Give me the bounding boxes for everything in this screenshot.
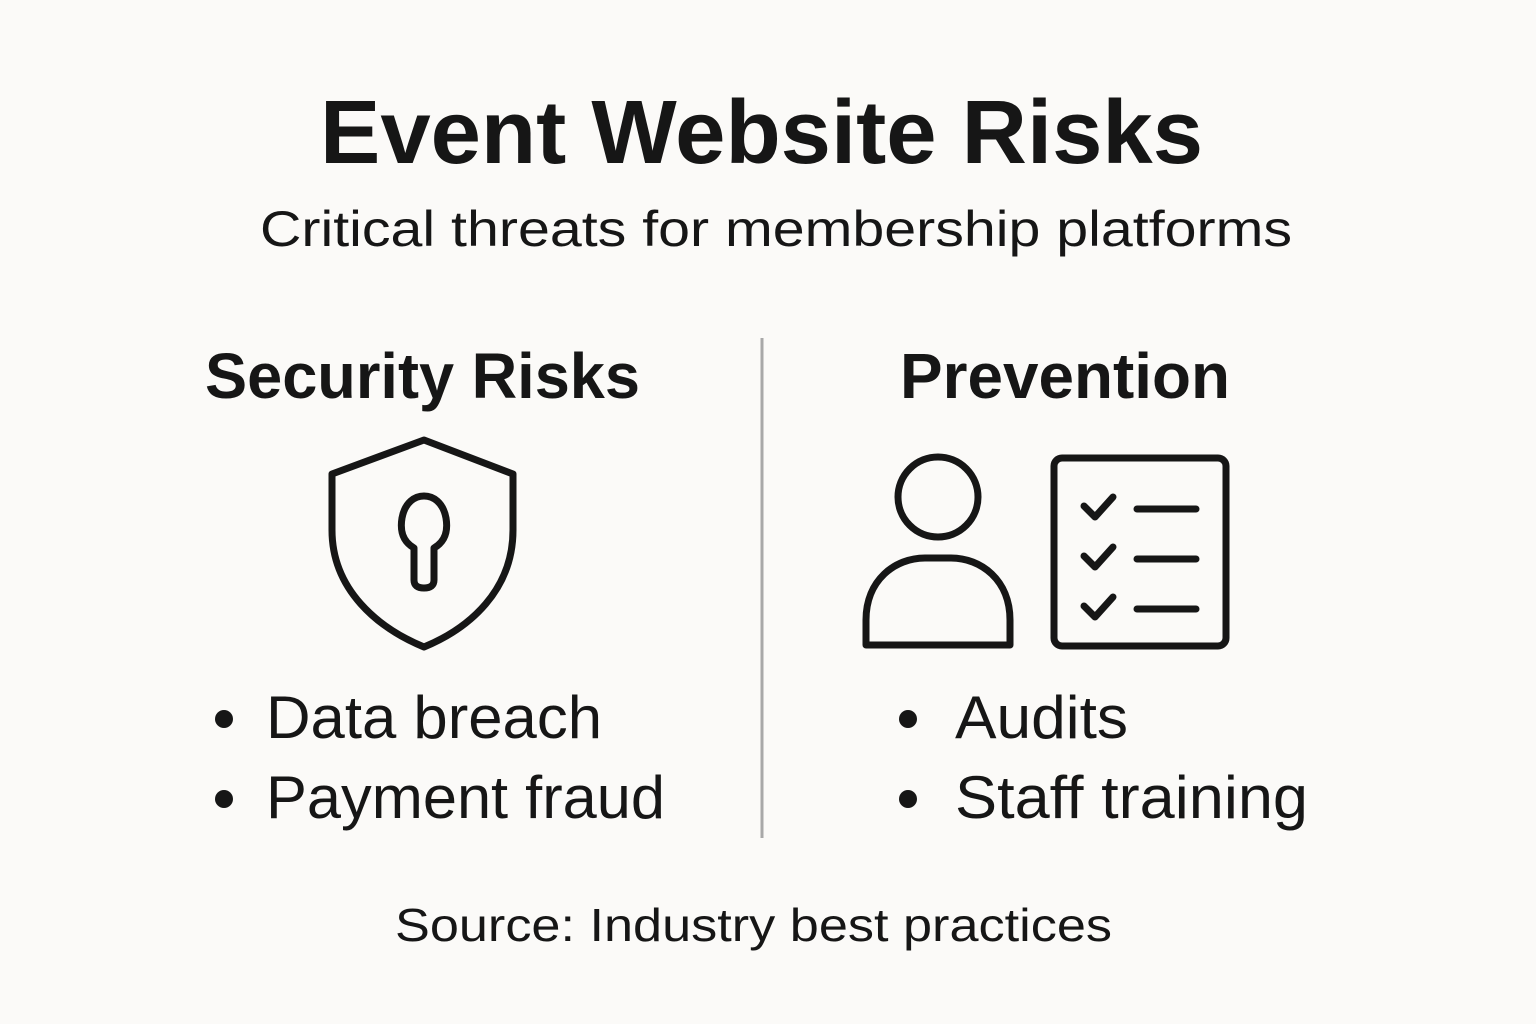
title: Event Website Risks xyxy=(320,83,1203,183)
bullet list: risks xyxy=(215,684,665,831)
bullet list: prevention xyxy=(899,684,1308,831)
divider xyxy=(760,338,764,838)
bullet list: prevention: Audits xyxy=(955,684,1128,751)
icon: person xyxy=(866,457,1010,645)
panel: security risks xyxy=(205,340,665,831)
subtitle: Critical threats for membership platforms xyxy=(260,201,1292,257)
source note: Source: Industry best practices xyxy=(395,899,1112,951)
icon: shield with keyhole xyxy=(332,440,513,647)
heading: prevention: Prevention xyxy=(900,340,1230,412)
heading: security risks: Security Risks xyxy=(205,340,640,412)
bullet list: risks: Payment fraud xyxy=(266,764,665,831)
bullet list: prevention: Staff training xyxy=(955,764,1308,831)
bullet list: risks: Data breach xyxy=(266,684,602,751)
icon: checklist xyxy=(1054,458,1226,646)
panel: prevention xyxy=(866,340,1308,831)
